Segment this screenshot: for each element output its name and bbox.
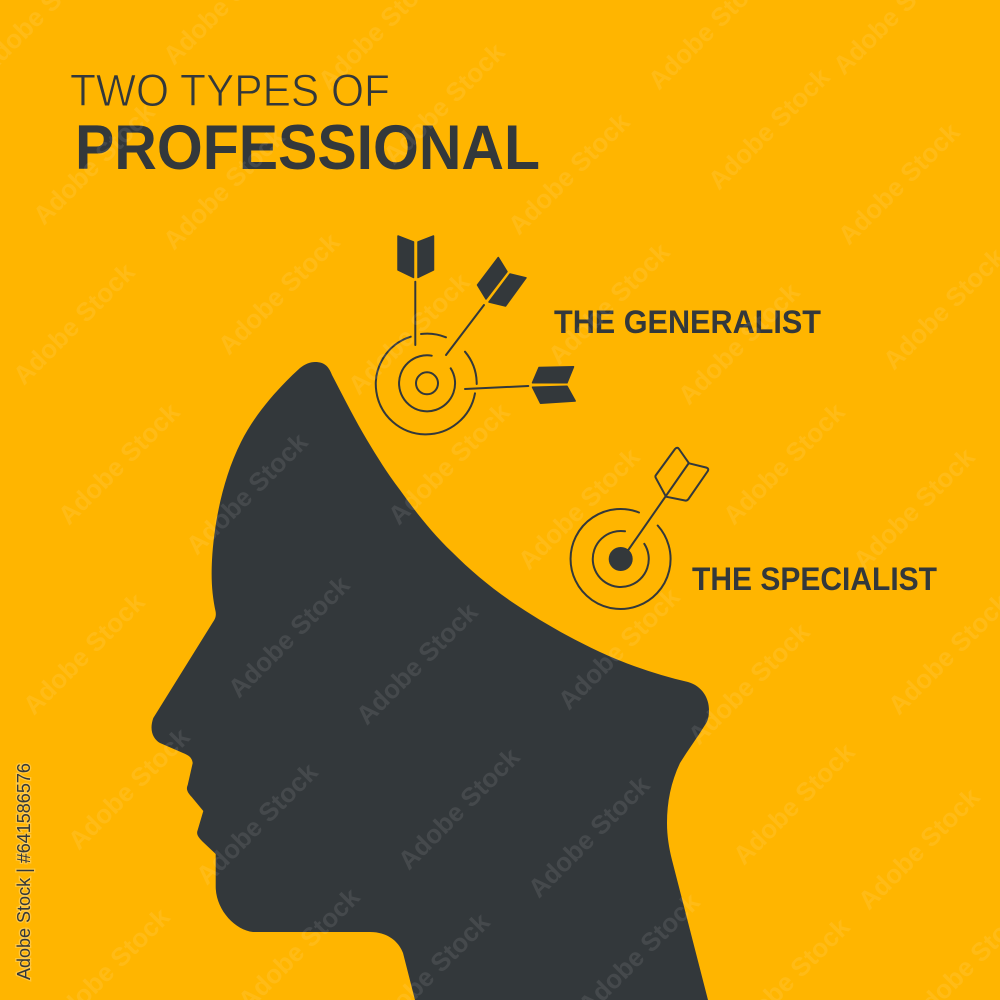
watermark pattern: Adobe Stock [350,596,484,730]
watermark pattern: Adobe Stock [727,736,861,870]
watermark pattern: Adobe Stock [552,581,686,715]
watermark pattern: Adobe Stock [17,586,151,720]
watermark pattern: Adobe Stock [522,769,656,903]
bullseye [609,547,633,571]
target rings [376,334,477,434]
icon: specialist target with arrow in bullseye [571,448,708,609]
watermark pattern: Adobe Stock [52,396,186,530]
title line 2: PROFESSIONAL [75,113,540,183]
watermark pattern: Adobe Stock [847,441,981,575]
arrow fletchings [398,236,575,403]
watermark pattern: Adobe Stock [27,96,161,230]
label: the specialist: THE SPECIALIST [692,561,937,597]
label: the generalist: THE GENERALIST [554,304,821,340]
head silhouette [152,362,709,1000]
watermark pattern: Adobe Stock [832,116,966,250]
watermark pattern: Adobe Stock [702,61,836,195]
target rings [571,509,671,609]
watermark pattern: Adobe Stock [377,36,511,170]
arrow [628,448,708,550]
watermark pattern: Adobe Stock [62,721,196,855]
watermark pattern: Adobe Stock [717,396,851,530]
watermark pattern: Adobe Stock [157,121,291,255]
watermark pattern: Adobe Stock [542,236,676,370]
watermark pattern: Adobe Stock [512,441,646,575]
icon: generalist target with three missed arrows [376,236,575,434]
watermark pattern: Adobe Stock [502,106,636,240]
watermark pattern: Adobe Stock [342,266,476,400]
title line 1: TWO TYPES OF [70,65,390,116]
watermark pattern: Adobe Stock [7,256,141,390]
watermark pattern: Adobe Stock [212,226,346,360]
watermark pattern: Adobe Stock [672,276,806,410]
watermark pattern: Adobe Stock [852,781,986,915]
watermark pattern: Adobe Stock [222,569,356,703]
watermark pattern: Adobe Stock [180,426,314,560]
stock id caption: Adobe Stock | #641586576 [14,763,34,980]
watermark pattern: Adobe Stock [392,741,526,875]
arrow shafts [415,282,528,389]
watermark pattern: Adobe Stock [382,396,516,530]
title [70,65,540,183]
watermark pattern: Adobe Stock [682,616,816,750]
watermark pattern: Adobe Stock [190,756,324,890]
